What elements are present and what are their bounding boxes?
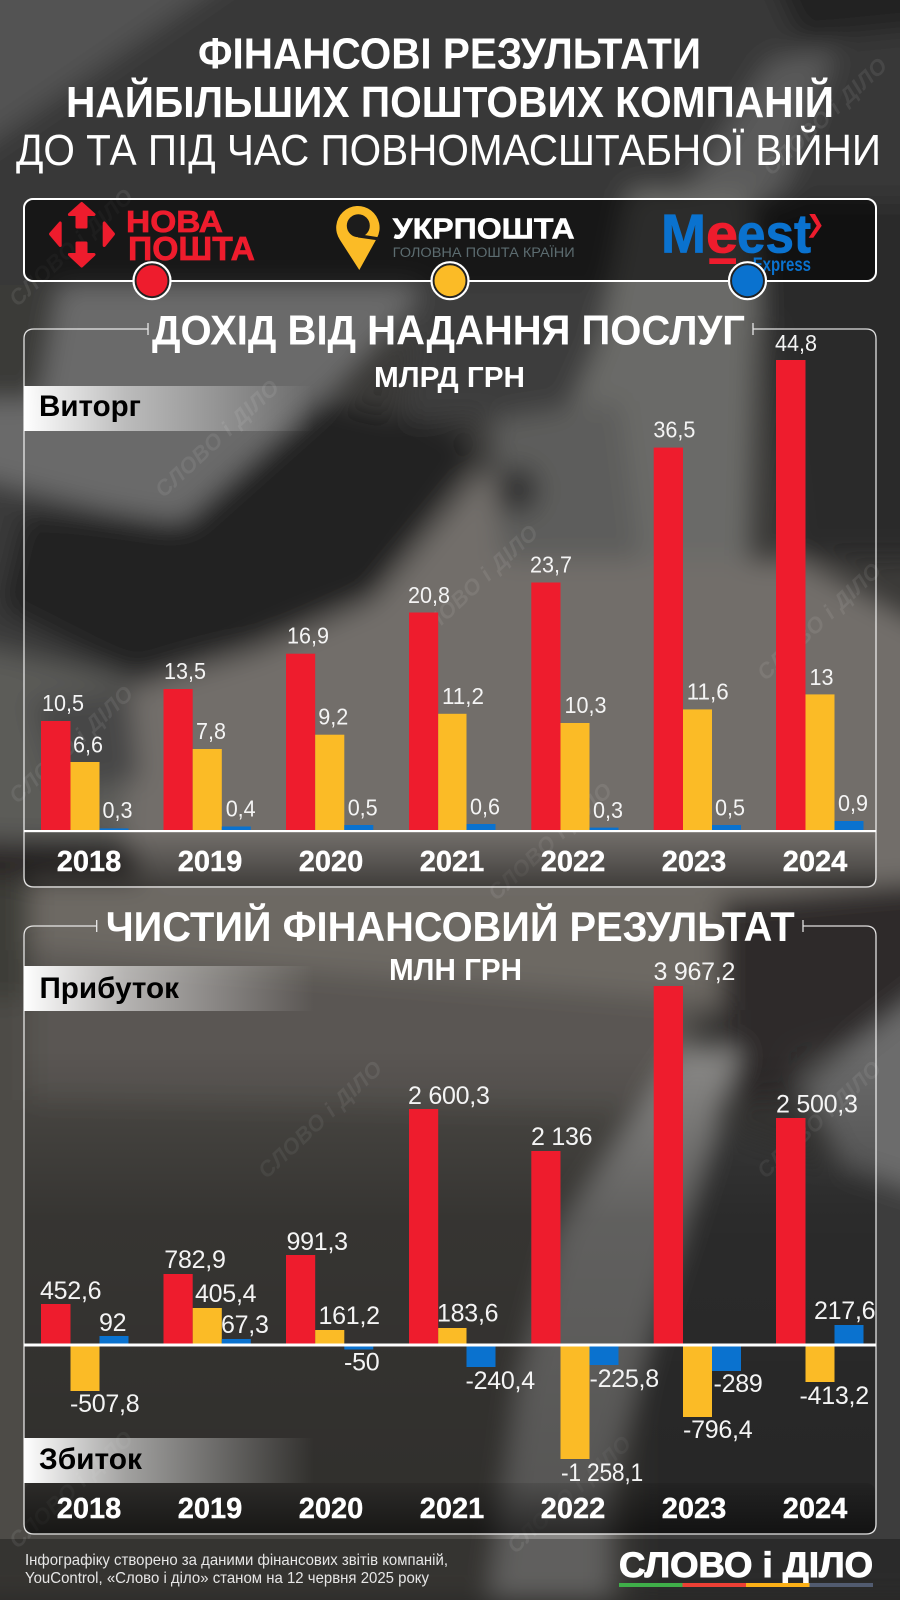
year labels: 2019 bbox=[178, 846, 242, 878]
revenue 2024: 44,8 bbox=[775, 330, 817, 356]
year labels bbox=[57, 1493, 847, 1525]
heading: ЧИСТИЙ ФІНАНСОВИЙ РЕЗУЛЬТАТ bbox=[106, 903, 795, 950]
revenue 2018: 6,6 bbox=[73, 732, 103, 758]
watermarks: СЛОВО і ДІЛО bbox=[4, 681, 138, 808]
axis bbox=[24, 830, 876, 832]
year labels: 2020 bbox=[299, 1493, 363, 1525]
net result 2024: -413,2 bbox=[800, 1382, 869, 1410]
net result 2021: 183,6 bbox=[437, 1300, 498, 1328]
logo: Meest Express bbox=[661, 202, 822, 276]
revenue 2023: 11,6 bbox=[687, 678, 729, 704]
logo: Slovo i Dilo: СЛОВО і ДІЛО bbox=[619, 1546, 873, 1585]
revenue 2023 bbox=[653, 417, 745, 830]
net result 2020: -50 bbox=[344, 1349, 379, 1377]
net result 2022: -1 258,1 bbox=[561, 1459, 643, 1487]
watermarks: СЛОВО і ДІЛО bbox=[253, 1056, 387, 1183]
revenue 2019: 13,5 bbox=[164, 658, 206, 684]
net result 2021: -240,4 bbox=[466, 1367, 535, 1395]
net result 2020: 161,2 bbox=[318, 1302, 380, 1330]
net result 2024: 2 500,3 bbox=[776, 1091, 858, 1119]
logo: Nova Poshta: ПОШТА bbox=[128, 230, 255, 267]
year labels: 2022 bbox=[541, 1493, 605, 1525]
band: revenue label: Виторг bbox=[39, 390, 141, 423]
revenue 2022: 0,3 bbox=[593, 797, 623, 823]
axis bbox=[24, 1344, 876, 1346]
unit: МЛРД ГРН bbox=[374, 362, 525, 394]
year labels: 2023 bbox=[662, 846, 726, 878]
panel: revenue chart bbox=[24, 306, 876, 887]
revenue 2022: 10,3 bbox=[564, 692, 606, 718]
heading: ДОХІД ВІД НАДАННЯ ПОСЛУГ bbox=[152, 306, 745, 354]
logo: Meest Express: Express bbox=[753, 255, 811, 276]
net result 2024: 217,6 bbox=[814, 1297, 875, 1325]
watermarks: СЛОВО і ДІЛО bbox=[483, 778, 617, 905]
revenue 2022 bbox=[530, 552, 623, 830]
net result 2019 bbox=[164, 1246, 269, 1344]
logo: Meest Express: M bbox=[661, 202, 706, 264]
net result 2018 bbox=[40, 1277, 139, 1418]
revenue 2018: 0,3 bbox=[102, 797, 132, 823]
band: profit label bbox=[24, 966, 314, 1011]
net result 2019: 782,9 bbox=[164, 1246, 226, 1274]
logo: Nova Poshta bbox=[50, 204, 255, 267]
revenue 2024: 13 bbox=[810, 664, 834, 690]
revenue 2021: 0,6 bbox=[470, 794, 500, 820]
source note bbox=[25, 1552, 448, 1587]
revenue 2019: 0,4 bbox=[226, 796, 256, 822]
year labels: 2024 bbox=[783, 1493, 847, 1525]
revenue 2020: 16,9 bbox=[287, 623, 329, 649]
revenue 2021: 11,2 bbox=[442, 683, 484, 709]
revenue 2018: 10,5 bbox=[42, 690, 84, 716]
band: loss label: Збиток bbox=[39, 1443, 143, 1476]
band: profit label: Прибуток bbox=[40, 972, 180, 1005]
title bbox=[16, 30, 881, 175]
logo: Ukrposhta bbox=[336, 206, 575, 270]
year labels: 2023 bbox=[662, 1493, 726, 1525]
panel frame bbox=[24, 920, 876, 1534]
revenue 2023: 0,5 bbox=[715, 794, 745, 820]
watermarks: СЛОВО і ДІЛО bbox=[752, 558, 886, 685]
logo: Ukrposhta: ГОЛОВНА ПОШТА КРАЇНИ bbox=[393, 245, 575, 260]
legend marker: blue bbox=[729, 262, 766, 299]
revenue 2024 bbox=[775, 330, 868, 830]
watermarks: СЛОВО і ДІЛО bbox=[752, 1056, 886, 1183]
net result 2020: 991,3 bbox=[286, 1228, 348, 1256]
revenue 2020: 9,2 bbox=[318, 704, 348, 730]
logo: Nova Poshta: НОВА bbox=[126, 204, 223, 239]
year labels bbox=[57, 846, 847, 878]
watermarks: СЛОВО і ДІЛО bbox=[758, 53, 892, 180]
year strip bbox=[25, 1483, 875, 1533]
watermarks: СЛОВО і ДІЛО bbox=[150, 375, 284, 502]
legend marker: yellow bbox=[432, 262, 468, 299]
legend panel: companies bbox=[24, 199, 876, 299]
revenue 2024: 0,9 bbox=[838, 790, 868, 816]
watermarks: СЛОВО і ДІЛО bbox=[409, 520, 543, 647]
logo: Meest Express: e bbox=[706, 202, 738, 264]
net result 2023: -796,4 bbox=[683, 1416, 753, 1444]
source note: YouControl, «Слово і діло» станом на 12 червня 2025 року bbox=[25, 1570, 429, 1587]
net result 2024 bbox=[776, 1091, 875, 1410]
logo: Ukrposhta: УКРПОШТА bbox=[393, 214, 575, 246]
net result 2022: -225,8 bbox=[590, 1365, 659, 1393]
watermarks: СЛОВО і ДІЛО bbox=[4, 1426, 138, 1553]
net result 2019: 67,3 bbox=[221, 1311, 269, 1339]
year labels: 2018 bbox=[57, 1493, 121, 1525]
logo: Meest Express: est bbox=[737, 202, 811, 264]
title: ФІНАНСОВІ РЕЗУЛЬТАТИ bbox=[198, 30, 701, 78]
watermarks: СЛОВО і ДІЛО bbox=[4, 184, 138, 311]
net result 2019: 405,4 bbox=[195, 1280, 257, 1308]
net result 2018: 452,6 bbox=[40, 1277, 101, 1305]
revenue 2023: 36,5 bbox=[653, 417, 695, 443]
revenue 2019: 7,8 bbox=[196, 718, 226, 744]
year labels: 2021 bbox=[420, 1493, 484, 1525]
year labels: 2018 bbox=[57, 846, 121, 878]
revenue 2020: 0,5 bbox=[348, 794, 378, 820]
footer band bbox=[0, 1539, 900, 1600]
year labels: 2022 bbox=[541, 846, 605, 878]
net result 2022: 2 136 bbox=[531, 1123, 592, 1151]
revenue 2018 bbox=[41, 690, 132, 830]
panel: net financial result chart bbox=[24, 903, 876, 1534]
revenue 2021 bbox=[408, 582, 500, 830]
unit: МЛН ГРН bbox=[389, 952, 522, 987]
net result 2021 bbox=[408, 1082, 535, 1395]
revenue 2021: 20,8 bbox=[408, 582, 450, 608]
source note: Інфографіку створено за даними фінансових звітів компаній, bbox=[25, 1552, 448, 1569]
legend marker: red bbox=[134, 262, 170, 299]
net result 2023: -289 bbox=[714, 1370, 763, 1398]
net result 2020 bbox=[286, 1228, 380, 1377]
net result 2018: -507,8 bbox=[70, 1390, 139, 1418]
band: revenue label bbox=[24, 386, 314, 431]
revenue 2019 bbox=[164, 658, 256, 830]
year labels: 2024 bbox=[783, 846, 847, 878]
year labels: 2021 bbox=[420, 846, 484, 878]
title: НАЙБІЛЬШИХ ПОШТОВИХ КОМПАНІЙ bbox=[66, 76, 834, 127]
panel fill bbox=[24, 1050, 876, 1534]
revenue 2020 bbox=[286, 623, 378, 830]
watermarks: СЛОВО і ДІЛО bbox=[502, 1431, 636, 1558]
revenue 2022: 23,7 bbox=[530, 552, 572, 578]
band: loss label bbox=[24, 1438, 314, 1483]
net result 2022 bbox=[531, 1123, 659, 1487]
net result 2021: 2 600,3 bbox=[408, 1082, 490, 1110]
net result 2018: 92 bbox=[99, 1309, 126, 1337]
panel frame bbox=[24, 323, 876, 887]
net result 2023 bbox=[654, 958, 763, 1444]
year strip bbox=[25, 832, 875, 886]
net result 2023: 3 967,2 bbox=[654, 958, 735, 986]
year labels: 2019 bbox=[178, 1493, 242, 1525]
year labels: 2020 bbox=[299, 846, 363, 878]
